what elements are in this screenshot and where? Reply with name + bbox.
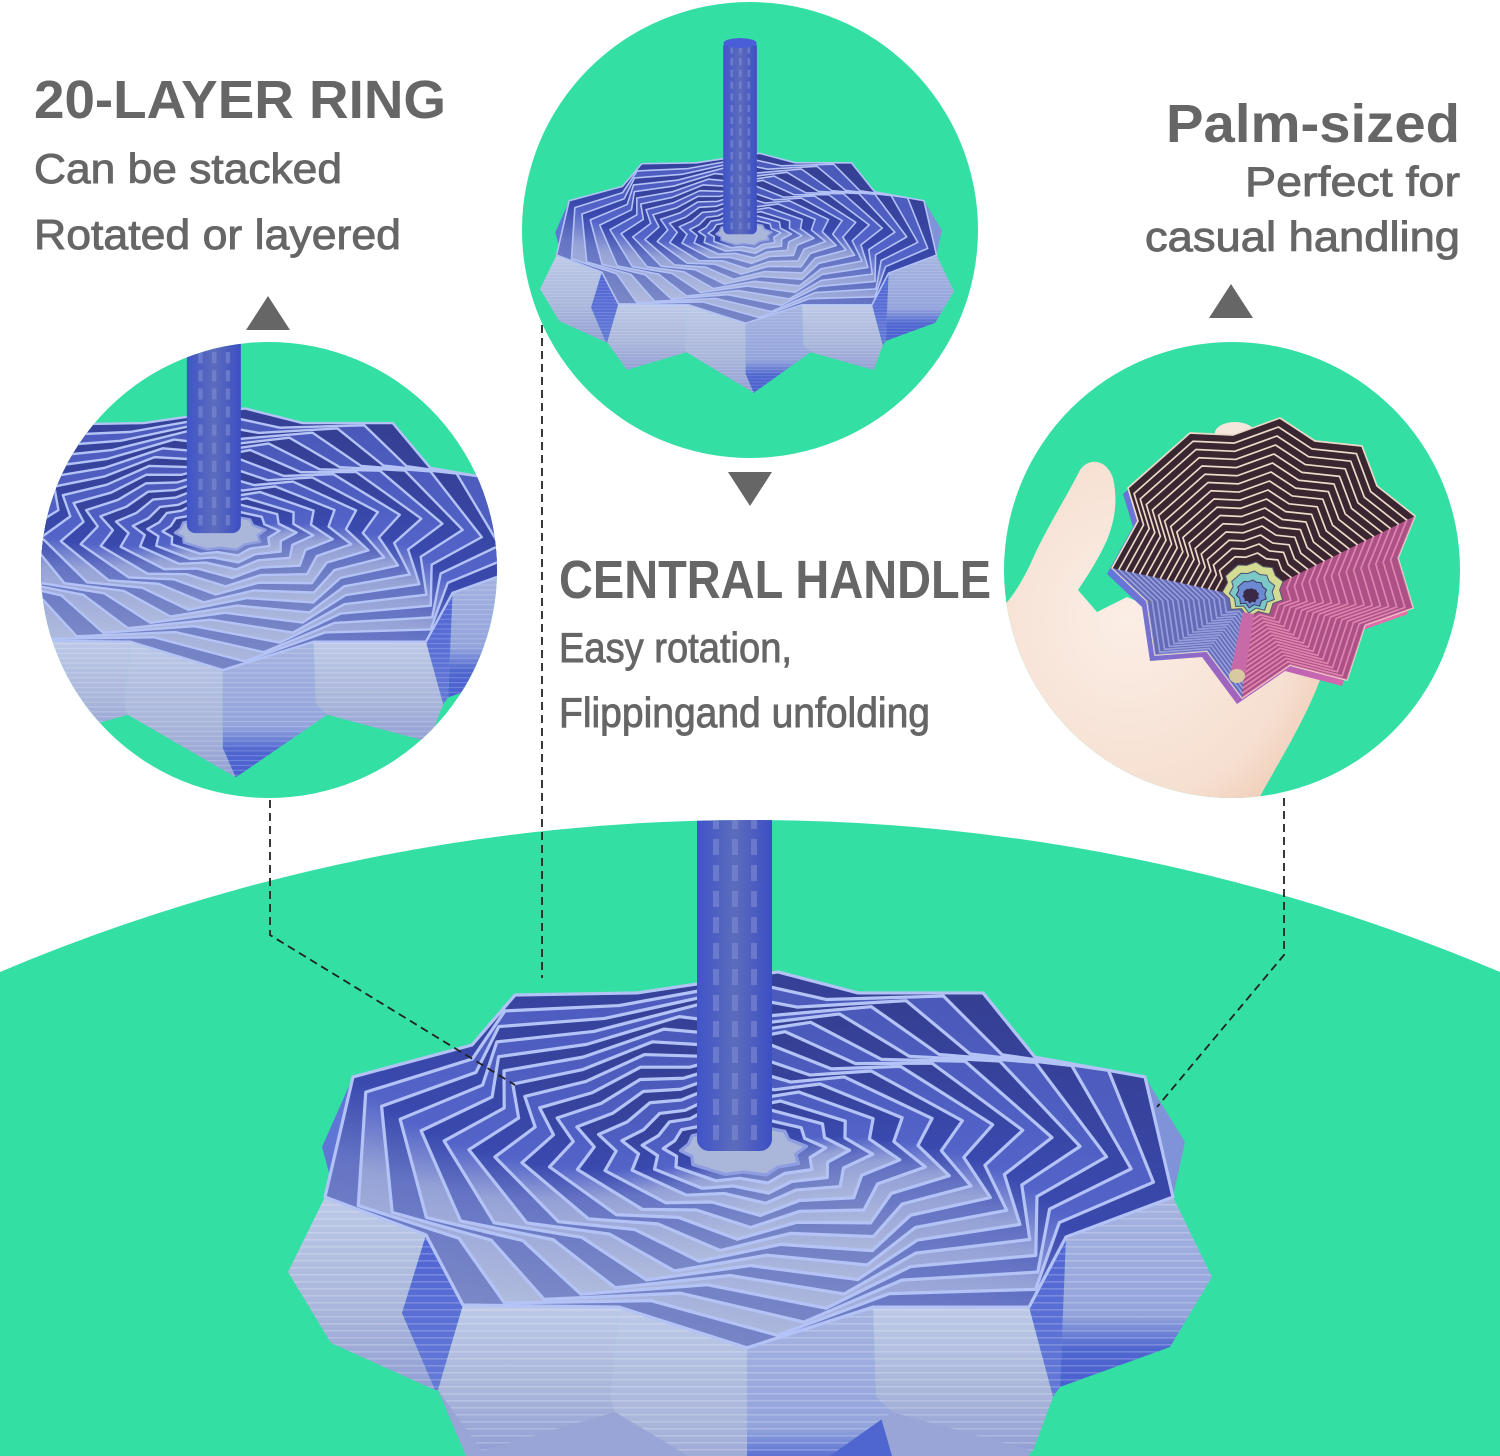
text block: palm-sized — [1145, 94, 1460, 260]
central handle of iridescent ring — [1230, 612, 1254, 677]
iridescent folded ring — [1107, 418, 1415, 704]
arrow: up to 20-layer text — [246, 296, 290, 330]
arrow: down to central handle text — [728, 472, 772, 506]
text block: palm-sized: Palm-sized — [1166, 94, 1460, 154]
large green arc panel — [0, 820, 1500, 1456]
arrow: up to palm-sized text — [1209, 284, 1253, 318]
text block: 20-layer ring: Rotated or layered — [34, 211, 401, 258]
text block: 20-layer ring: 20-LAYER RING — [34, 70, 446, 130]
text block: 20-layer ring — [34, 70, 446, 258]
panel: 20-layer ring circle — [41, 342, 497, 798]
text block: central handle: Flippingand unfolding — [559, 689, 930, 736]
text block: central handle — [559, 550, 991, 736]
panel: palm-sized circle — [1000, 342, 1460, 810]
connector: right circle to ring — [1157, 798, 1284, 1107]
text block: central handle: Easy rotation, — [559, 624, 792, 671]
fingertip behind ring — [1215, 422, 1252, 434]
connector: left circle to ring — [270, 800, 515, 1085]
text block: central handle: CENTRAL HANDLE — [559, 550, 991, 610]
icon: hand holding ring — [1000, 462, 1320, 810]
text block: palm-sized: Perfect for — [1245, 158, 1460, 205]
connector: centre circle to ring — [541, 325, 543, 978]
text block: palm-sized: casual handling — [1145, 213, 1460, 260]
main ring product photo — [288, 717, 1212, 1456]
text block: 20-layer ring: Can be stacked — [34, 145, 342, 192]
panel: central handle circle — [522, 2, 978, 458]
